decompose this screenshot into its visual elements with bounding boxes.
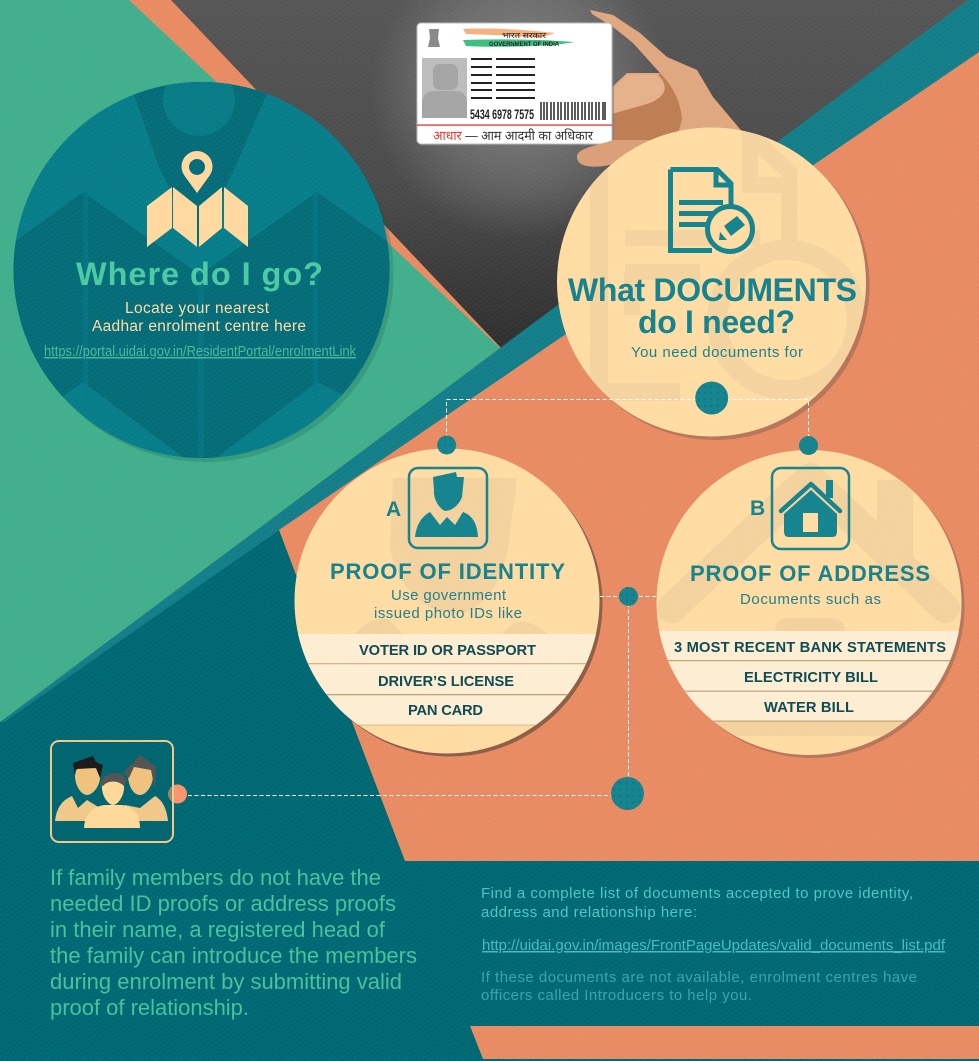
panel: what documents do I need [557, 120, 870, 440]
text: government IDs [374, 587, 522, 622]
text: family members note: proof of relationship. [50, 995, 249, 1020]
list: identity documents: PAN CARD [408, 703, 483, 719]
list: identity documents: DRIVER’S LICENSE [378, 674, 514, 690]
heading: what documents: do I need? [638, 304, 795, 340]
list: address documents: 3 MOST RECENT BANK STATEMENTS [674, 640, 946, 656]
heading: proof of identity: PROOF OF IDENTITY [330, 559, 565, 584]
red rule [417, 124, 612, 126]
list bands [290, 634, 610, 726]
list bands [650, 631, 970, 722]
text: family members note: If family members do not have the [50, 865, 381, 890]
connector dots [168, 382, 818, 810]
background: dark teal lower block [0, 530, 979, 1061]
text: family members note: in their name, a registered head of [50, 917, 386, 942]
letter A: A [386, 498, 401, 521]
link: enrolment portal: https://portal.uidai.gov.in/ResidentPortal/enrolmentLink [44, 344, 357, 360]
panel: proof of identity [290, 448, 610, 756]
barcode [541, 102, 605, 120]
Aadhaar number: 5434 6978 7575 [470, 106, 534, 122]
heading: proof of address: PROOF OF ADDRESS [690, 561, 930, 586]
text: family members note [50, 865, 417, 1020]
curled finger [612, 75, 665, 114]
letter B: B [750, 497, 765, 520]
text: introducers note: If these documents are not available, enrolment centres have [481, 969, 917, 986]
link: valid documents list: http://uidai.gov.in/images/FrontPageUpdates/valid_documents_list.pdf [482, 937, 946, 954]
connector lines [188, 400, 808, 796]
background: dark grey wedge [171, 0, 979, 349]
text: introducers note [481, 969, 917, 1004]
background: teal diagonal band [0, 0, 979, 722]
photo placeholder [422, 58, 467, 118]
slogan: आधार — आम आदमी का अधिकार [433, 128, 594, 143]
panel: where do I go [10, 64, 394, 470]
text: family members note: during enrolment by submitting valid [50, 969, 402, 994]
panel: proof of address [650, 450, 970, 758]
illustration: hand holding Aadhaar card [417, 10, 745, 175]
text: complete documents list [481, 885, 913, 921]
text: documents such as: Documents such as [740, 591, 881, 608]
heading: where do I go: Where do I go? [76, 256, 323, 292]
emblem [428, 29, 440, 47]
text: locate your centre: Aadhar enrolment centre here [92, 318, 306, 335]
list: identity documents: VOTER ID OR PASSPORT [359, 643, 536, 659]
text: introducers note: officers called Introducers to help you. [481, 987, 752, 1004]
watermark: document [590, 130, 865, 401]
government label [489, 31, 559, 48]
hand [590, 10, 745, 175]
flag swashes [463, 28, 555, 38]
heading: what documents: What DOCUMENTS [568, 272, 857, 308]
watermark: house [657, 463, 960, 736]
watermark: map and pin [10, 64, 392, 470]
list: identity documents [359, 643, 536, 719]
woman [110, 755, 168, 821]
man [55, 756, 112, 821]
detail lines [471, 58, 535, 99]
list: address documents [674, 640, 946, 716]
text: complete documents list: Find a complete list of documents accepted to prove identity, [481, 885, 913, 902]
icon: house [772, 468, 849, 549]
text: family members note: needed ID proofs or address proofs [50, 891, 396, 916]
icon: map with location pin [147, 151, 248, 247]
list: address documents: WATER BILL [764, 700, 854, 716]
text: locate your centre: Locate your nearest [125, 300, 270, 317]
government label: भारत सरकार [502, 31, 547, 40]
text: complete documents list: address and relationship here: [481, 904, 697, 921]
icon: family group [51, 741, 173, 842]
text: you need documents for: You need documents for [631, 344, 803, 361]
government label: GOVERNMENT OF INDIA [489, 41, 559, 48]
text: government IDs: Use government [391, 587, 507, 604]
heading: what documents [568, 272, 857, 340]
icon: document with pencil [670, 170, 752, 252]
background: green wedge [0, 0, 500, 722]
child [84, 773, 140, 828]
text: government IDs: issued photo IDs like [374, 605, 522, 622]
watermark: person [356, 478, 546, 634]
text: family members note: the family can introduce the members [50, 943, 417, 968]
text: locate your centre [92, 300, 306, 335]
thumb [577, 140, 665, 170]
palm shading [612, 73, 682, 148]
list: address documents: ELECTRICITY BILL [744, 670, 878, 686]
icon: person portrait [409, 468, 487, 548]
ID card [417, 23, 614, 146]
